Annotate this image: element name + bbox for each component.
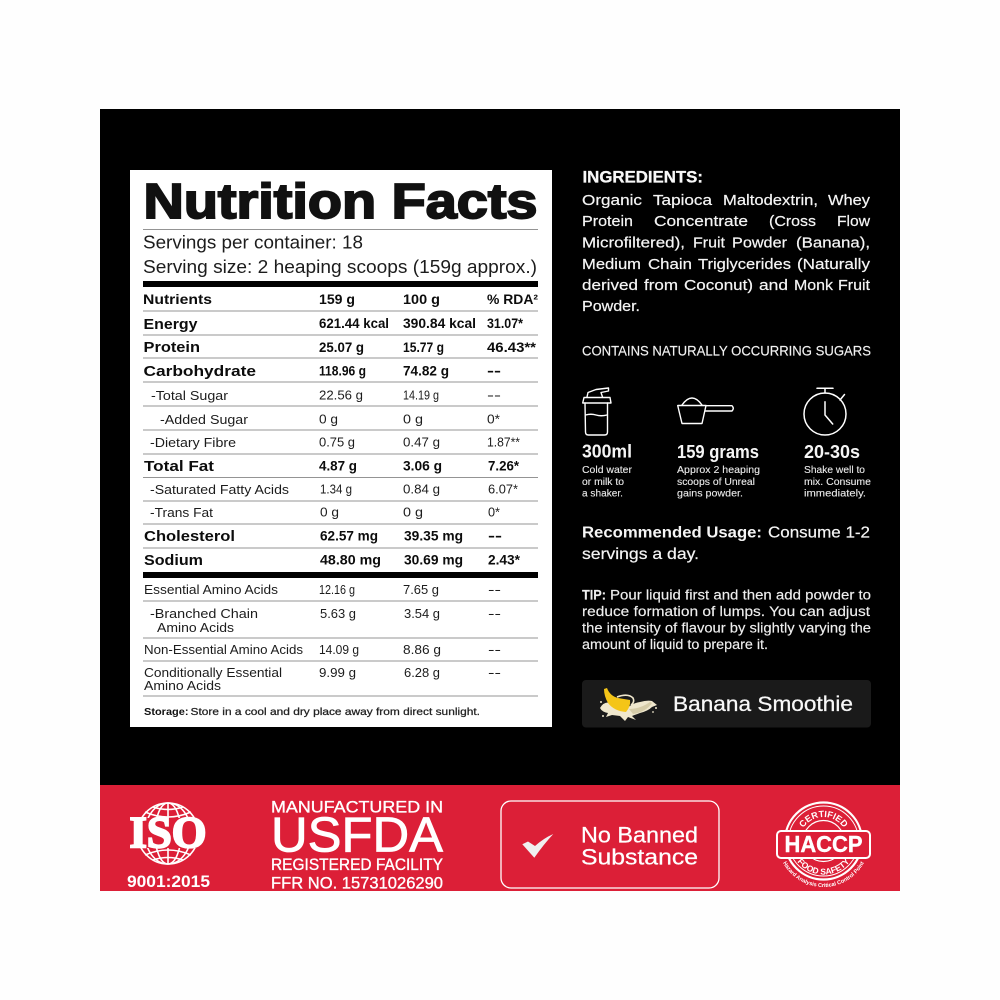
sugars statement: CONTAINS NATURALLY OCCURRING SUGARS: [582, 343, 871, 359]
flavour badge: [582, 680, 871, 728]
row: trans fat: 0 g: [403, 504, 423, 520]
step: powder: scoops of Unreal: [677, 476, 755, 488]
badge: no banned substance: [501, 801, 719, 888]
table header row: % RDA²: [487, 292, 539, 307]
row: trans fat: 0*: [488, 504, 500, 520]
badge: ISO 9001: ISO: [130, 808, 206, 857]
ingredients text: Coconut): [684, 277, 753, 294]
recommended usage: Consume 1-2: [768, 524, 870, 542]
ingredients text: Medium: [582, 256, 641, 273]
row: conditionally essential amino acids: [144, 665, 501, 693]
ingredients text: Flow: [837, 213, 870, 230]
row: branched chain amino acids: Amino Acids: [157, 620, 235, 635]
badge: HACCP: HACCP: [784, 831, 862, 857]
row: non-essential amino acids: [144, 642, 501, 657]
badge: USFDA: REGISTERED FACILITY: [271, 855, 443, 874]
step: water: or milk to: [582, 476, 624, 488]
row: energy: 390.84 kcal: [403, 316, 476, 331]
step: powder: gains powder.: [677, 488, 743, 500]
row: total sugar: --: [487, 388, 501, 402]
row: branched chain amino acids: -Branched Chain: [150, 606, 258, 621]
row: essential amino acids: 7.65 g: [403, 582, 439, 597]
table header row: [143, 292, 539, 307]
badge: HACCP: Hazard Analysis Critical Control Point: [783, 861, 864, 887]
row: conditionally essential amino acids: --: [488, 665, 501, 680]
panel: nutrition facts: [130, 170, 552, 727]
servings information: [143, 232, 537, 277]
row: sodium: Sodium: [144, 553, 203, 569]
badge: ISO 9001: [127, 803, 210, 891]
step: shake time: Shake well to: [804, 464, 865, 476]
row: total fat: 4.87 g: [319, 458, 357, 474]
step: water: a shaker.: [582, 488, 623, 500]
table header row: 100 g: [403, 292, 440, 307]
row: protein: 46.43**: [487, 340, 537, 355]
row: dietary fibre: 0.47 g: [403, 434, 440, 450]
row: total sugar: -Total Sugar: [151, 388, 229, 403]
row: non-essential amino acids: --: [488, 642, 501, 657]
ingredients text: Whey: [828, 192, 871, 209]
row: dietary fibre: 0.75 g: [319, 434, 355, 450]
row: branched chain amino acids: 5.63 g: [320, 606, 356, 621]
icon: globe: [138, 803, 198, 864]
row: branched chain amino acids: --: [488, 606, 501, 621]
row: conditionally essential amino acids: Conditionally Essential: [144, 665, 282, 680]
ingredients text: Tapioca: [653, 192, 713, 209]
row: total fat: Total Fat: [144, 459, 214, 475]
step: powder: Approx 2 heaping: [677, 464, 760, 476]
row: total sugar: 22.56 g: [319, 388, 363, 402]
row: sodium: 30.69 mg: [404, 552, 463, 568]
ingredients text: Fruit: [838, 277, 871, 294]
step: shake time: immediately.: [804, 488, 866, 500]
recommended usage: Recommended Usage:: [582, 524, 762, 542]
row: carbohydrate: 74.82 g: [403, 364, 449, 378]
row: total fat: 3.06 g: [403, 458, 442, 474]
row: added sugar: -Added Sugar: [160, 412, 249, 427]
row: carbohydrate: [144, 364, 501, 380]
row: trans fat: 0 g: [320, 504, 339, 520]
ingredients text: from: [644, 277, 678, 294]
row: added sugar: 0*: [487, 412, 500, 426]
row: carbohydrate: Carbohydrate: [144, 364, 256, 380]
row: branched chain amino acids: 3.54 g: [404, 606, 440, 621]
row: dietary fibre: [150, 434, 520, 450]
badge: no banned substance: No Banned: [581, 822, 698, 847]
row: cholesterol: [144, 528, 502, 545]
row: saturated fatty acids: 0.84 g: [403, 482, 440, 496]
row: conditionally essential amino acids: 9.99 g: [319, 665, 356, 680]
table header row: 159 g: [319, 292, 355, 307]
ingredients text: (Cross: [769, 213, 816, 230]
row: added sugar: [160, 412, 500, 427]
row: energy: Energy: [144, 317, 198, 333]
step: water: Cold water: [582, 464, 632, 476]
badge: USFDA: [271, 797, 443, 892]
ingredients text: Fruit: [693, 234, 726, 252]
row: non-essential amino acids: 8.86 g: [403, 642, 441, 657]
step: shake time: mix. Consume: [804, 476, 871, 488]
row: total fat: [144, 458, 520, 475]
ingredients text: Monk: [794, 277, 834, 294]
step: powder: 159 grams: [677, 442, 759, 462]
row: saturated fatty acids: [150, 482, 518, 497]
ingredients text: Triglycerides: [698, 256, 791, 273]
badge: USFDA: USFDA: [271, 809, 443, 863]
ingredients text: derived: [582, 277, 638, 294]
ingredients heading: INGREDIENTS:: [582, 168, 703, 187]
row: non-essential amino acids: 14.09 g: [319, 642, 359, 657]
step: powder: [677, 398, 760, 500]
black background panel: [100, 109, 900, 785]
step: shake time: [804, 388, 871, 500]
badge: HACCP: FOOD SAFETY: [798, 859, 848, 875]
step: shake time: 20-30s: [804, 442, 860, 462]
row: cholesterol: 39.35 mg: [404, 528, 463, 544]
heading: nutrition facts: Nutrition Facts: [144, 175, 538, 229]
recommended usage: [582, 524, 870, 563]
row: saturated fatty acids: 6.07*: [488, 482, 518, 496]
icon: shaker: [583, 388, 611, 435]
row: conditionally essential amino acids: 6.28 g: [404, 665, 440, 680]
row: energy: 621.44 kcal: [319, 316, 389, 331]
row: branched chain amino acids: [150, 606, 501, 635]
ingredients text: Powder: [732, 234, 787, 252]
step: water: [582, 388, 632, 500]
badge: USFDA: MANUFACTURED IN: [271, 797, 443, 816]
row: protein: [144, 340, 537, 356]
row: protein: 15.77 g: [403, 340, 444, 355]
row: energy: [144, 316, 524, 333]
row: essential amino acids: [144, 582, 501, 597]
ingredients text: Chain: [648, 256, 692, 273]
row: dietary fibre: 1.87**: [487, 434, 520, 450]
row: trans fat: [150, 504, 500, 520]
row: essential amino acids: Essential Amino Acids: [144, 582, 279, 597]
badge: USFDA: FFR NO. 15731026290: [271, 873, 443, 892]
row: trans fat: -Trans Fat: [150, 505, 213, 520]
row: sodium: [144, 552, 521, 569]
ingredients text: and: [759, 277, 788, 294]
badge: ISO 9001: 9001:2015: [127, 872, 210, 891]
row: total sugar: 14.19 g: [403, 388, 439, 402]
icon: banana splash: [600, 688, 657, 721]
row: saturated fatty acids: -Saturated Fatty Acids: [150, 482, 290, 497]
row: dietary fibre: -Dietary Fibre: [150, 435, 236, 450]
row: cholesterol: --: [488, 528, 502, 544]
tip: [582, 587, 871, 652]
table header row: Nutrients: [143, 292, 212, 307]
row: non-essential amino acids: Non-Essential Amino Acids: [144, 642, 304, 657]
row: cholesterol: 62.57 mg: [320, 528, 378, 544]
ingredients text: Protein: [582, 213, 633, 230]
recommended usage: servings a day.: [582, 546, 699, 563]
ingredients text: Maltodextrin,: [723, 192, 818, 209]
ingredients text: Concentrate: [654, 213, 748, 230]
tip: the intensity of flavour by slightly varying the: [582, 620, 871, 636]
row: energy: 31.07*: [487, 316, 524, 331]
panel: certification band: [100, 785, 900, 892]
row: added sugar: 0 g: [319, 412, 338, 426]
icon: check mark: [522, 834, 553, 858]
row: essential amino acids: 12.16 g: [319, 582, 355, 597]
ingredients text: (Banana),: [796, 234, 870, 252]
row: conditionally essential amino acids: Amino Acids: [144, 678, 222, 693]
tip: Pour liquid first and then add powder to: [610, 587, 871, 602]
storage note: Store in a cool and dry place away from direct sunlight.: [190, 707, 480, 718]
tip: reduce formation of lumps. You can adjust: [582, 604, 870, 619]
row: sodium: 48.80 mg: [320, 552, 381, 568]
ingredients text: Powder.: [582, 298, 640, 315]
row: essential amino acids: --: [488, 582, 501, 597]
badge: HACCP: CERTIFIED: [800, 810, 848, 826]
servings information: Servings per container: 18: [143, 232, 363, 252]
tip: TIP:: [582, 587, 606, 602]
badge: HACCP: [776, 801, 871, 887]
flavour badge: Banana Smoothie: [673, 693, 853, 716]
row: carbohydrate: --: [487, 364, 501, 378]
tip: amount of liquid to prepare it.: [582, 637, 768, 652]
row: carbohydrate: 118.96 g: [319, 364, 366, 378]
row: protein: Protein: [144, 340, 200, 356]
row: total sugar: [151, 388, 501, 403]
ingredients text: Microfiltered),: [582, 234, 685, 252]
icon: stopwatch: [804, 388, 846, 435]
icon: scoop: [678, 398, 733, 424]
step: water: 300ml: [582, 442, 632, 462]
row: total fat: 7.26*: [488, 458, 520, 474]
ingredients text: (Naturally: [797, 256, 871, 273]
row: added sugar: 0 g: [403, 412, 423, 426]
storage note: Storage:: [144, 707, 188, 718]
ingredients text: [582, 192, 871, 315]
ingredients text: Organic: [582, 192, 643, 209]
row: cholesterol: Cholesterol: [144, 529, 235, 545]
row: sodium: 2.43*: [488, 552, 521, 568]
badge: no banned substance: Substance: [581, 844, 698, 869]
row: protein: 25.07 g: [319, 340, 364, 355]
row: saturated fatty acids: 1.34 g: [320, 482, 352, 496]
servings information: Serving size: 2 heaping scoops (159g approx.): [143, 257, 537, 277]
